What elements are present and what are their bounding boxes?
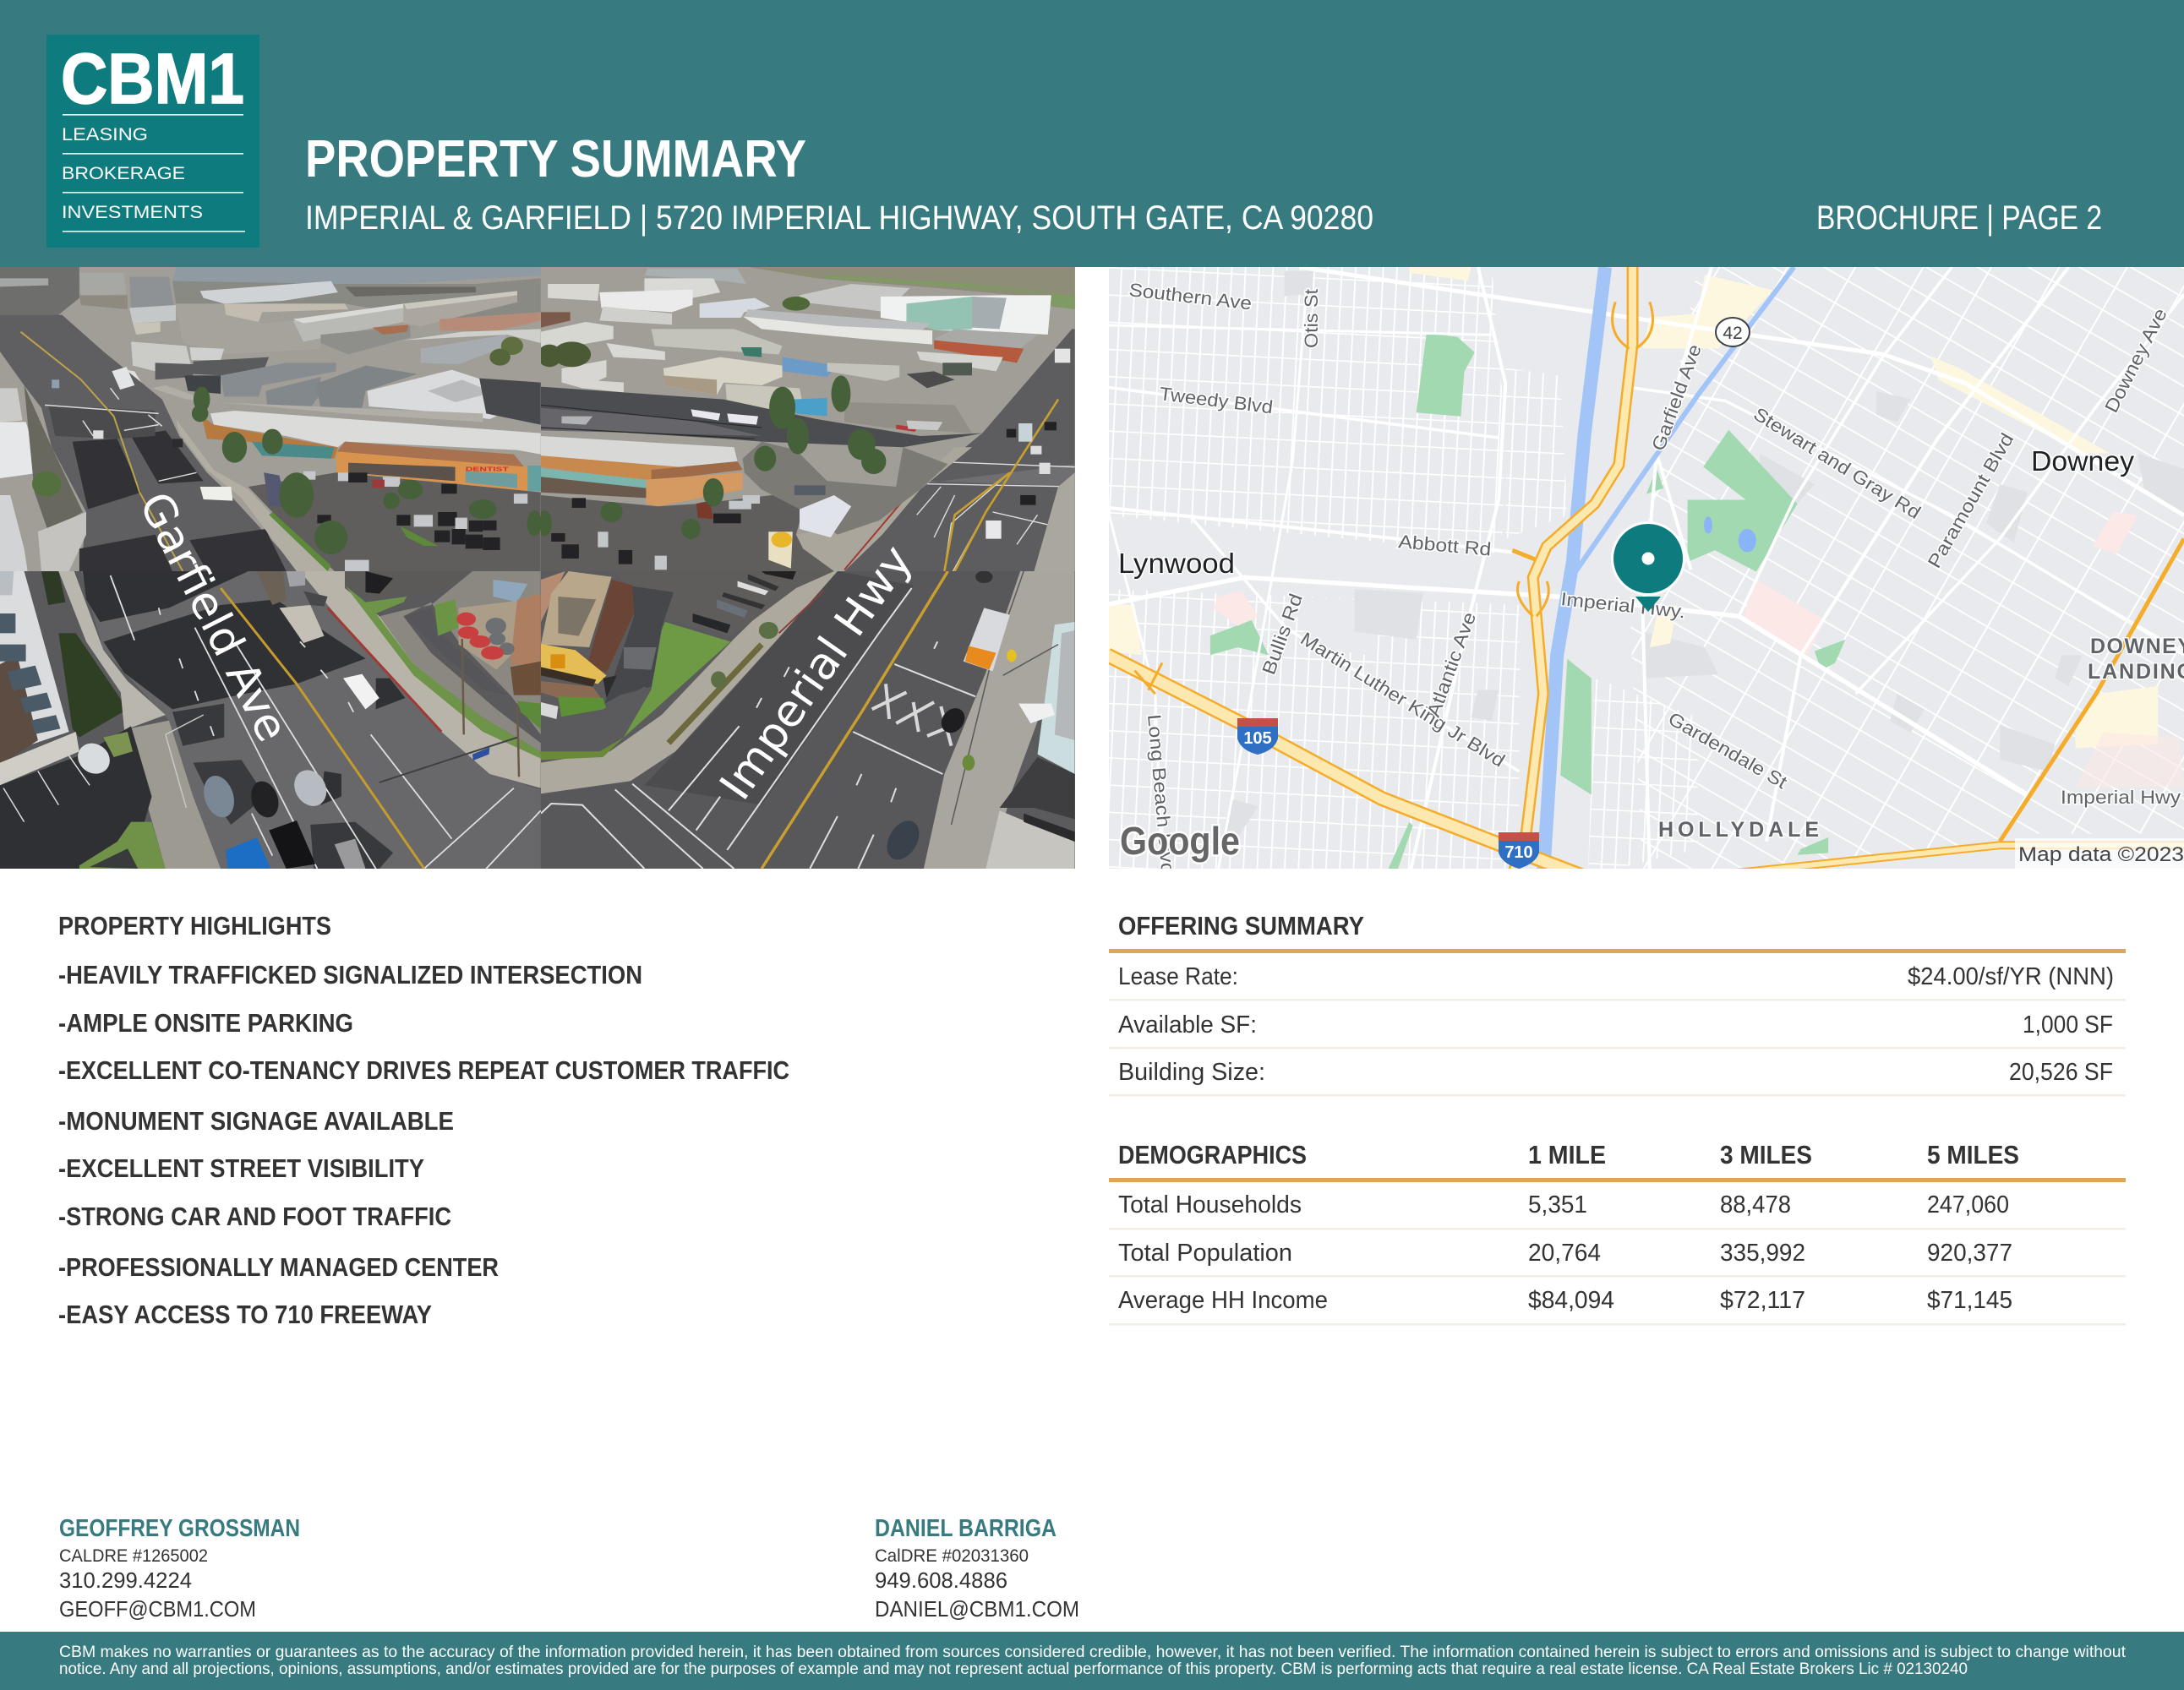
demographics table: 920,377 bbox=[1927, 1240, 2012, 1267]
map street labels bbox=[1118, 279, 2184, 875]
demographics table: $84,094 bbox=[1528, 1287, 1614, 1314]
photo lower left: Garfield Ave and left buildings bbox=[0, 571, 541, 875]
offering summary table: OFFERING SUMMARY bbox=[1118, 911, 1364, 940]
right sidewalk and buildings bbox=[924, 571, 1075, 869]
map street labels: Long Beach Blvd bbox=[1144, 713, 1178, 875]
gray building blocks bbox=[1224, 271, 2184, 837]
header band bbox=[0, 0, 2184, 267]
offering summary table bbox=[1109, 911, 2126, 1097]
demographics table: $72,117 bbox=[1720, 1287, 1805, 1314]
contact: Geoffrey Grossman bbox=[59, 1515, 300, 1622]
contact: Daniel Barriga bbox=[875, 1515, 1079, 1622]
property highlights list: -EXCELLENT CO-TENANCY DRIVES REPEAT CUSTOMER TRAFFIC bbox=[58, 1055, 789, 1085]
logo: CBM1 bbox=[61, 39, 244, 118]
panel: location map bbox=[1107, 267, 2184, 875]
contact: Geoffrey Grossman: CALDRE #1265002 bbox=[59, 1546, 208, 1566]
icon: 42 route shield: 42 bbox=[1723, 324, 1743, 343]
vehicles on road upper bbox=[112, 367, 134, 390]
strip mall west wing bbox=[210, 411, 541, 455]
demographics table: 5,351 bbox=[1528, 1191, 1587, 1218]
page label: BROCHURE | PAGE 2 bbox=[1816, 199, 2102, 237]
offering summary table: $24.00/sf/YR (NNN) bbox=[1908, 963, 2114, 990]
photo upper left: road and industrial buildings bbox=[0, 267, 542, 571]
contact: Geoffrey Grossman: GEOFF@CBM1.COM bbox=[59, 1596, 256, 1622]
cross street bbox=[541, 387, 982, 447]
map attribution bbox=[2015, 838, 2184, 869]
icon: location pin bbox=[1611, 521, 1685, 612]
demographics table: 20,764 bbox=[1528, 1240, 1601, 1267]
map attribution: Map data ©2023 bbox=[2018, 843, 2184, 866]
property highlights list: -AMPLE ONSITE PARKING bbox=[58, 1008, 353, 1038]
demographics table: DEMOGRAPHICS bbox=[1118, 1140, 1307, 1169]
contact: Daniel Barriga: DANIEL@CBM1.COM bbox=[875, 1596, 1079, 1622]
street grids bbox=[1107, 267, 2184, 875]
map street labels: Southern Ave bbox=[1127, 279, 1253, 313]
map street labels: Stewart and Gray Rd bbox=[1750, 403, 1925, 523]
property highlights list: -MONUMENT SIGNAGE AVAILABLE bbox=[58, 1106, 454, 1136]
strip mall east wing bbox=[541, 436, 738, 467]
label: Imperial Hwy: Imperial Hwy bbox=[711, 537, 923, 810]
offering summary table: 20,526 SF bbox=[2009, 1059, 2113, 1086]
map street labels: Otis St bbox=[1301, 289, 1322, 348]
property highlights list: -HEAVILY TRAFFICKED SIGNALIZED INTERSECTION bbox=[58, 960, 642, 989]
icon: 105 interstate shield: 105 bbox=[1243, 729, 1272, 748]
Google logo: Google bbox=[1120, 819, 1240, 863]
map street labels: Imperial Hwy bbox=[2061, 787, 2181, 808]
map street labels: Lynwood bbox=[1118, 548, 1235, 579]
cars right bbox=[986, 521, 1002, 539]
demographics table: Total Population bbox=[1118, 1240, 1292, 1267]
map street labels: Garfield Ave bbox=[1647, 341, 1706, 454]
logo: INVESTMENTS bbox=[62, 203, 203, 222]
map street labels: Downey Ave bbox=[2100, 305, 2171, 416]
cars west lot bbox=[317, 472, 500, 550]
property highlights list: -EXCELLENT STREET VISIBILITY bbox=[58, 1153, 424, 1183]
icon: 710 interstate shield: 710 bbox=[1504, 843, 1533, 862]
offering summary table: 1,000 SF bbox=[2023, 1011, 2113, 1039]
left building bbox=[0, 571, 69, 746]
demographics table: 88,478 bbox=[1720, 1191, 1791, 1218]
map street labels: Atlantic Ave bbox=[1422, 609, 1480, 720]
demographics table: $71,145 bbox=[1927, 1287, 2012, 1314]
logo: BROKERAGE bbox=[62, 164, 185, 183]
demographics table bbox=[1109, 1140, 2126, 1325]
demographics table: Average HH Income bbox=[1118, 1287, 1328, 1314]
demographics table: 335,992 bbox=[1720, 1240, 1805, 1267]
lot cars bbox=[693, 613, 730, 633]
offering summary table: Lease Rate: bbox=[1118, 963, 1238, 990]
property highlights list bbox=[58, 911, 789, 1329]
map street labels: HOLLYDALE bbox=[1658, 818, 1819, 842]
parks and land use bbox=[1107, 267, 2184, 875]
subtitle address: IMPERIAL & GARFIELD | 5720 IMPERIAL HIGHWAY, SOUTH GATE, CA 90280 bbox=[305, 199, 1373, 237]
river channels bbox=[1543, 267, 1605, 875]
imperial hwy upper bbox=[844, 329, 1075, 571]
property highlights list: -STRONG CAR AND FOOT TRAFFIC bbox=[58, 1202, 451, 1231]
logo: LEASING bbox=[62, 125, 148, 144]
freeways bbox=[1512, 267, 1633, 875]
demographics table: 1 MILE bbox=[1528, 1140, 1606, 1169]
photo upper right: buildings, cross street and intersection bbox=[537, 267, 1082, 571]
map street labels: Tweedy Blvd bbox=[1158, 383, 1274, 417]
contact: Geoffrey Grossman: GEOFFREY GROSSMAN bbox=[59, 1515, 300, 1542]
map street labels: Downey bbox=[2031, 445, 2134, 477]
property highlights list: -EASY ACCESS TO 710 FREEWAY bbox=[58, 1300, 432, 1329]
logo bbox=[46, 35, 259, 248]
icon: 105 interstate shield bbox=[1237, 718, 1278, 755]
title: PROPERTY SUMMARY bbox=[305, 130, 806, 188]
contact: Daniel Barriga: DANIEL BARRIGA bbox=[875, 1515, 1057, 1542]
palms bbox=[192, 387, 542, 554]
offering summary table: Available SF: bbox=[1118, 1011, 1257, 1039]
footer disclaimer: CBM makes no warranties or guarantees as to the accuracy of the information provided herein, it has been obtained from sources considered credible, however, it has not been verified. The information contained herein is subject to errors and omissions and is subject to change without bbox=[59, 1643, 2127, 1661]
property highlights list: PROPERTY HIGHLIGHTS bbox=[58, 911, 331, 940]
contact: Daniel Barriga: 949.608.4886 bbox=[875, 1567, 1007, 1593]
demographics table: 5 MILES bbox=[1927, 1140, 2019, 1169]
icon: 42 route shield bbox=[1716, 318, 1750, 346]
panel: aerial photo bbox=[0, 267, 1082, 875]
contact: Daniel Barriga: CalDRE #02031360 bbox=[875, 1546, 1029, 1566]
map street labels: Bullis Rd bbox=[1258, 591, 1307, 678]
map street labels: Abbott Rd bbox=[1398, 531, 1492, 560]
demographics table: 3 MILES bbox=[1720, 1140, 1812, 1169]
map street labels: Imperial Hwy. bbox=[1559, 588, 1686, 622]
photo lower right: pad restaurant, Imperial Hwy and right sidewalk bbox=[541, 570, 1082, 875]
map street labels: Gardendale St bbox=[1665, 708, 1791, 793]
icon: 710 interstate shield bbox=[1499, 832, 1539, 869]
contact: Geoffrey Grossman: 310.299.4224 bbox=[59, 1567, 192, 1593]
demographics table: Total Households bbox=[1118, 1191, 1302, 1218]
demographics table: 247,060 bbox=[1927, 1191, 2009, 1218]
footer disclaimer: notice. Any and all projections, opinions, assumptions, and/or estimates provided are for the purposes of example and may not represent actual performance of this property. CBM is performing acts that require a real estate license. CA Real Estate Brokers Lic # 02130240 bbox=[59, 1660, 1968, 1678]
label: Garfield Ave: Garfield Ave bbox=[128, 484, 298, 750]
offering summary table: Building Size: bbox=[1118, 1059, 1265, 1086]
property highlights list: -PROFESSIONALLY MANAGED CENTER bbox=[58, 1252, 499, 1282]
map street labels: Paramount Blvd bbox=[1924, 429, 2017, 571]
map street labels: Martin Luther King Jr Blvd bbox=[1297, 628, 1509, 771]
vehicles bbox=[257, 571, 287, 605]
major white streets bbox=[1300, 267, 2184, 515]
footer disclaimer bbox=[0, 1632, 2184, 1690]
photo upper left: road and industrial buildings: DENTIST bbox=[466, 466, 509, 472]
